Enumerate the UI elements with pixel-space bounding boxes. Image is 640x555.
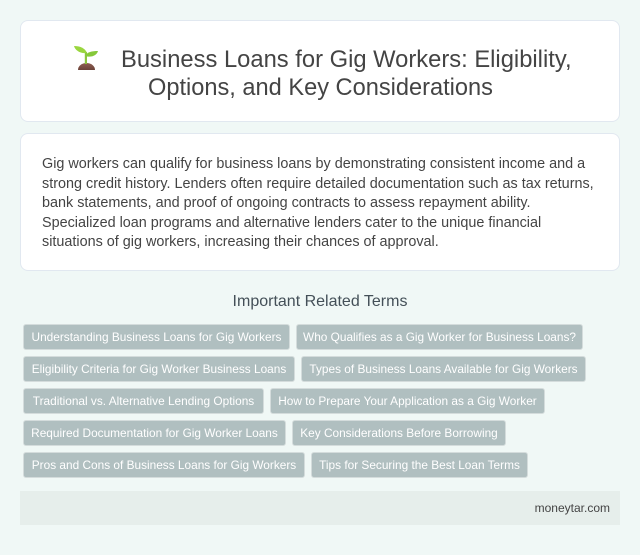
tag xyxy=(23,356,295,382)
title xyxy=(121,46,572,101)
panel: summary xyxy=(20,133,620,271)
tag xyxy=(23,452,305,478)
tag xyxy=(296,324,583,350)
tag: Required Documentation for Gig Worker Loans xyxy=(31,426,278,440)
tag xyxy=(23,324,290,350)
tag: Key Considerations Before Borrowing xyxy=(300,426,498,440)
footer source text: moneytar.com xyxy=(535,501,610,515)
tag: Who Qualifies as a Gig Worker for Business Loans? xyxy=(303,330,576,344)
icon: seedling xyxy=(74,46,98,70)
tag: Pros and Cons of Business Loans for Gig Workers xyxy=(32,458,296,472)
tag xyxy=(292,420,506,446)
tag: Eligibility Criteria for Gig Worker Business Loans xyxy=(32,362,286,376)
tag xyxy=(311,452,528,478)
panel: title card xyxy=(20,20,620,122)
summary text: Gig workers can qualify for business loans by demonstrating consistent income and a xyxy=(42,156,585,172)
footer bar xyxy=(20,491,620,525)
tag xyxy=(270,388,545,414)
summary text: Specialized loan programs and alternative lenders cater to the unique financial xyxy=(42,214,541,230)
summary text: situations of gig workers, increasing their chances of approval. xyxy=(42,234,439,250)
tag: Understanding Business Loans for Gig Workers xyxy=(32,330,281,344)
summary text xyxy=(42,156,594,250)
summary text: bank statements, and proof of ongoing contracts to assess repayment ability. xyxy=(42,195,530,211)
heading: related terms: Important Related Terms xyxy=(233,293,407,310)
tag: Traditional vs. Alternative Lending Options xyxy=(33,394,254,408)
tag: Types of Business Loans Available for Gig Workers xyxy=(309,362,578,376)
tag xyxy=(23,420,286,446)
tag xyxy=(23,388,264,414)
tag: Tips for Securing the Best Loan Terms xyxy=(319,458,520,472)
related term tags xyxy=(23,324,586,478)
title: Options, and Key Considerations xyxy=(148,75,493,101)
summary text: strong credit history. Lenders often require detailed documentation such as tax returns, xyxy=(42,176,594,192)
tag xyxy=(301,356,586,382)
tag: How to Prepare Your Application as a Gig Worker xyxy=(278,394,537,408)
title: Business Loans for Gig Workers: Eligibility, xyxy=(121,46,572,73)
